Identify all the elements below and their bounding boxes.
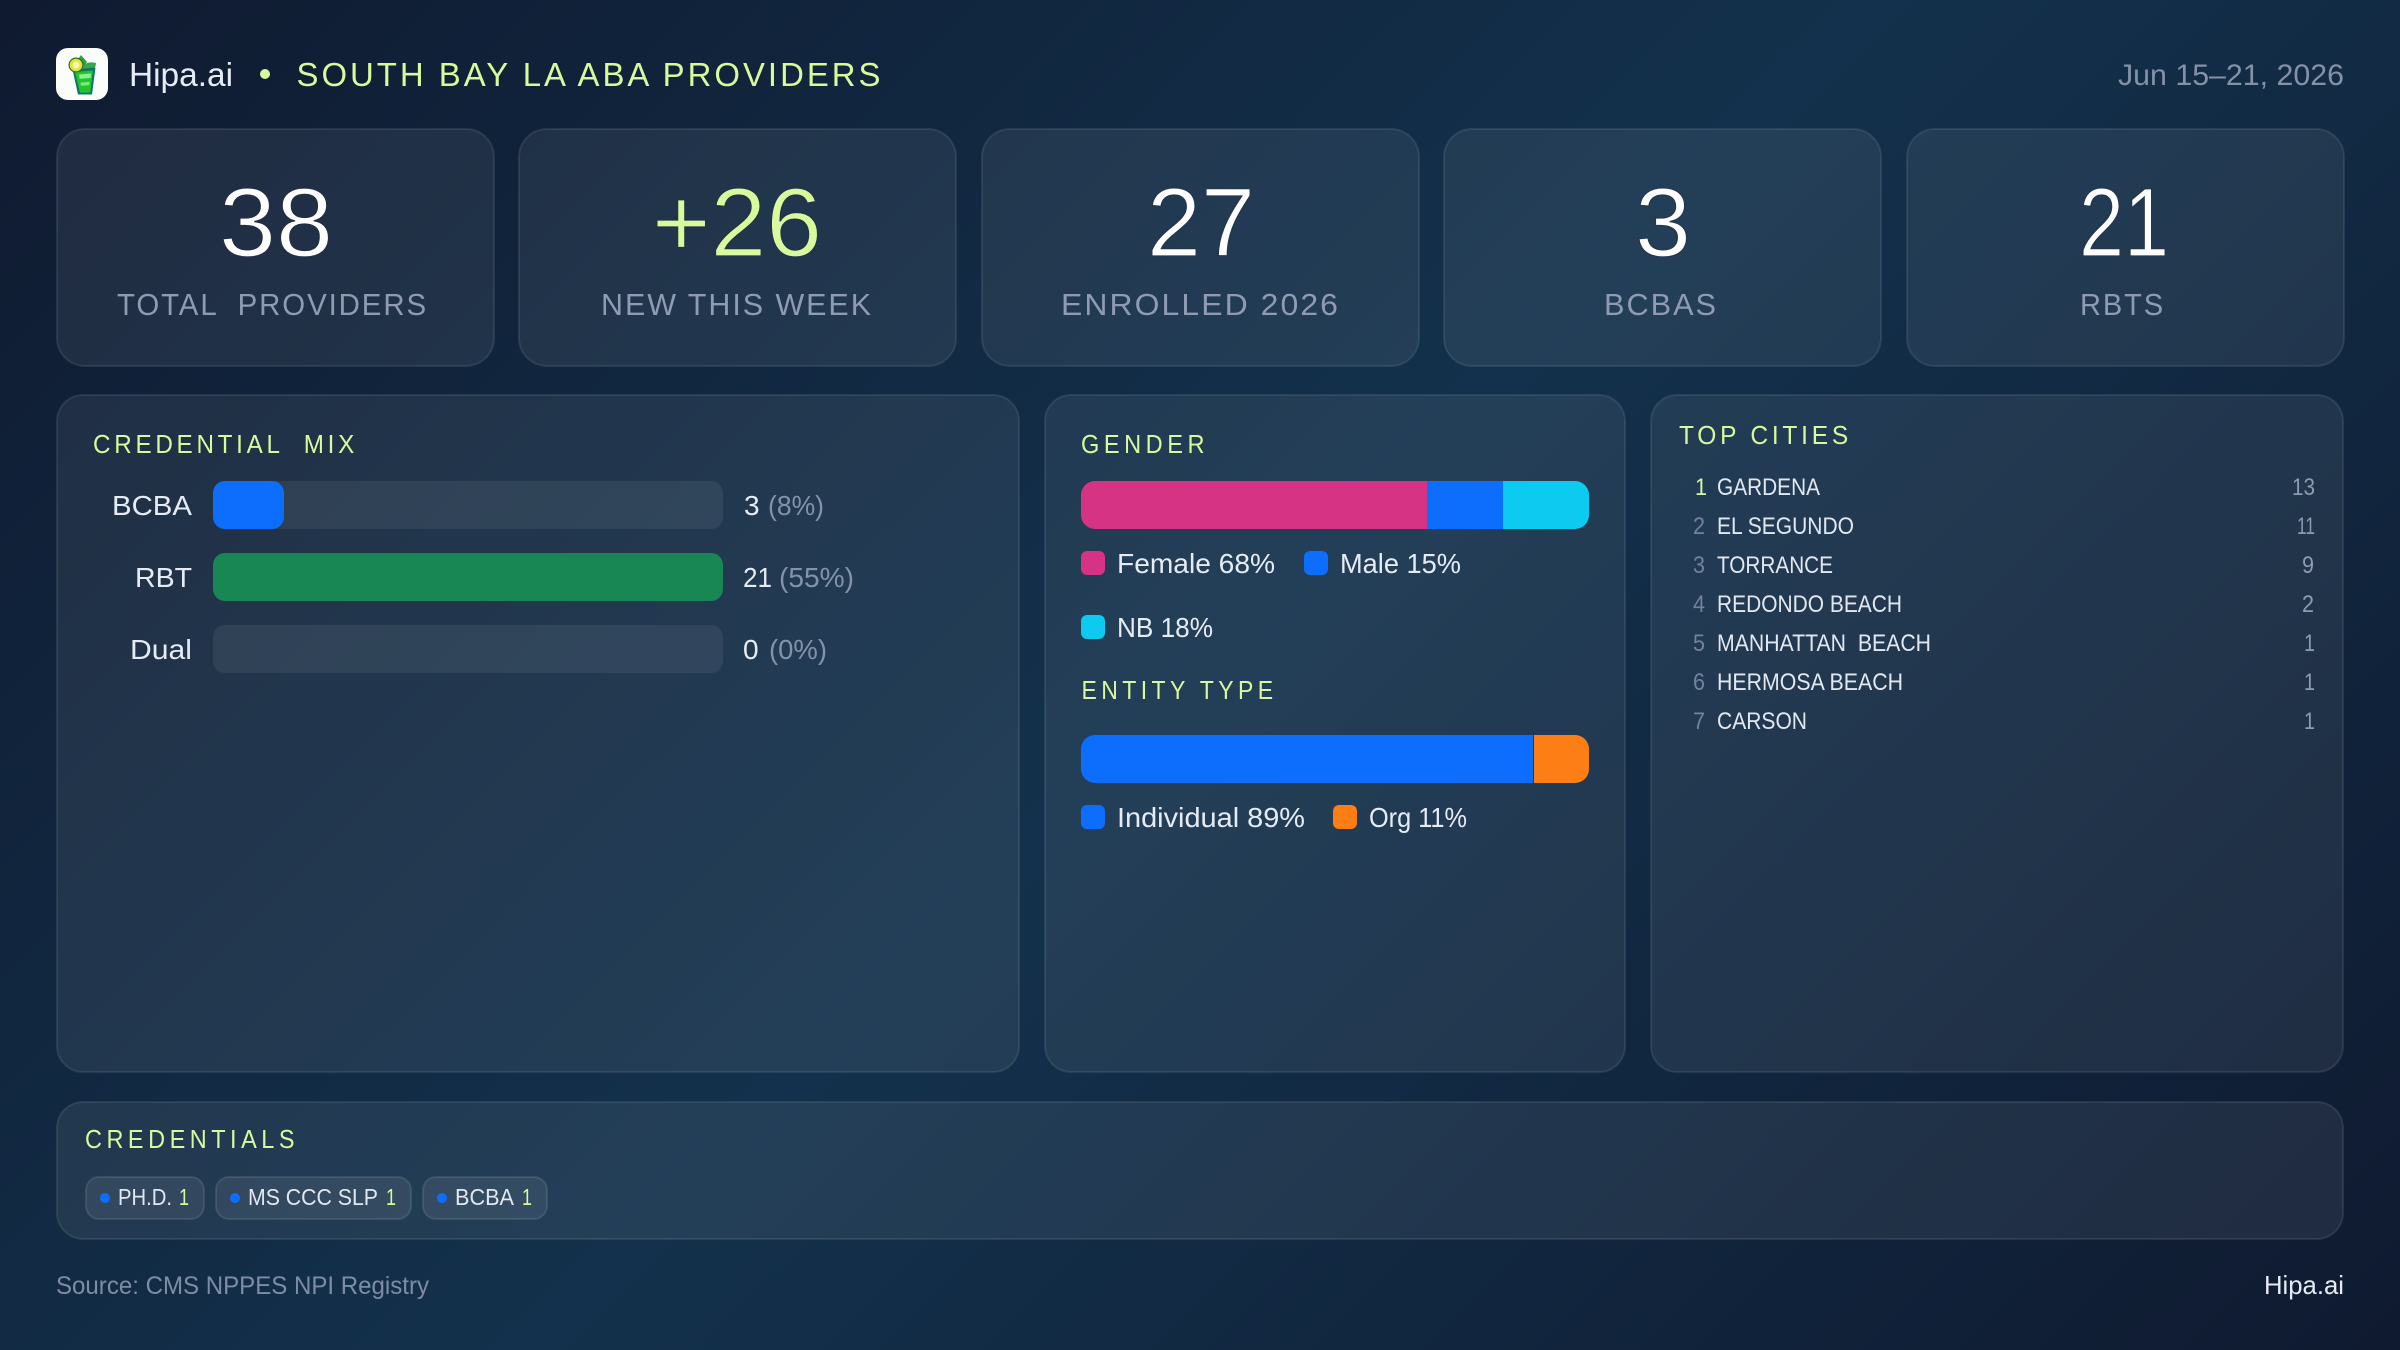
header <box>56 48 2344 100</box>
label: BCBAS <box>1604 287 1718 322</box>
city row 1: 13 <box>2292 474 2315 501</box>
kpi card: rbts <box>1907 129 2344 366</box>
kpi card: bcbas <box>1444 129 1881 366</box>
city row 5: MANHATTAN BEACH <box>1717 630 1931 657</box>
bar row: dual: (0%) <box>769 634 827 665</box>
legend: entity type: Individual 89% <box>1117 802 1305 833</box>
chip: ms ccc slp: MS CCC SLP <box>248 1184 378 1210</box>
legend: gender: Female 68% <box>1117 548 1275 579</box>
city row 4: 4 <box>1693 591 1705 618</box>
city row 4 <box>1693 591 2314 618</box>
city row 2 <box>1693 513 2315 540</box>
panel: top cities <box>1651 395 2343 1072</box>
city row 5: 5 <box>1693 630 1705 657</box>
source note: Source: CMS NPPES NPI Registry <box>56 1272 429 1300</box>
legend: entity type <box>1081 802 1467 833</box>
legend: gender: NB 18% <box>1117 612 1213 643</box>
city row 2: 11 <box>2297 513 2315 540</box>
panel: credential mix <box>57 395 1019 1072</box>
city row 6: 6 <box>1693 669 1705 696</box>
footer brand: Hipa.ai <box>2264 1270 2344 1300</box>
label: NEW THIS WEEK <box>601 287 873 322</box>
chip: ph.d.: PH.D. <box>118 1184 172 1210</box>
heading: gender: GENDER <box>1081 429 1209 459</box>
bar row: bcba: BCBA <box>112 490 192 521</box>
heading: entity type: ENTITY TYPE <box>1082 675 1278 705</box>
bar row: rbt: RBT <box>135 562 192 593</box>
value: 38 <box>219 168 333 277</box>
chip: ms ccc slp <box>216 1177 411 1219</box>
city row 5: 1 <box>2304 630 2315 657</box>
city row 6: 1 <box>2304 669 2315 696</box>
bar row: rbt: (55%) <box>779 562 854 593</box>
chip: bcba: 1 <box>522 1184 532 1210</box>
bar row: dual: 0 <box>743 634 759 665</box>
label: RBTS <box>2080 287 2165 322</box>
kpi card: new this week <box>519 129 956 366</box>
heading: CREDENTIALS <box>85 1124 299 1154</box>
bar row: bcba <box>112 481 824 529</box>
bar row: bcba: (8%) <box>768 490 824 521</box>
legend: entity type: Org 11% <box>1369 802 1467 833</box>
city row 6 <box>1693 669 2315 696</box>
city row 4: 2 <box>2302 591 2314 618</box>
chip: ph.d. <box>86 1177 204 1219</box>
value: 3 <box>1635 168 1691 277</box>
city row 7: CARSON <box>1717 708 1807 735</box>
heading: CREDENTIAL MIX <box>93 429 358 459</box>
city row 1: 1 <box>1695 474 1707 501</box>
value: 27 <box>1147 168 1255 277</box>
legend: gender: Male 15% <box>1340 548 1461 579</box>
chip: ms ccc slp: 1 <box>386 1184 396 1210</box>
city row 3: 3 <box>1693 552 1705 579</box>
bar row: rbt: 21 <box>743 562 772 593</box>
bar row: dual <box>130 625 827 673</box>
label: ENROLLED 2026 <box>1061 287 1340 322</box>
panel: credentials <box>57 1102 2343 1239</box>
city row 7 <box>1693 708 2315 735</box>
city row 7: 1 <box>2304 708 2315 735</box>
bar row: bcba: 3 <box>744 490 760 521</box>
panel: gender and entity type <box>1045 395 1625 1072</box>
kpi card: total providers <box>57 129 494 366</box>
date range: Jun 15–21, 2026 <box>2118 59 2344 92</box>
bar row: rbt <box>135 553 854 601</box>
city row 1: GARDENA <box>1717 474 1820 501</box>
city row 2: EL SEGUNDO <box>1717 513 1854 540</box>
icon: mojito glass logo <box>56 48 108 100</box>
city row 1 <box>1695 474 2315 501</box>
heading: TOP CITIES <box>1679 420 1852 450</box>
footer <box>56 1270 2344 1300</box>
bullet <box>260 69 270 79</box>
city row 3: TORRANCE <box>1717 552 1833 579</box>
bar row: dual: Dual <box>130 634 192 665</box>
value: 21 <box>2079 168 2169 277</box>
city row 6: HERMOSA BEACH <box>1717 669 1903 696</box>
chip: bcba <box>423 1177 547 1219</box>
label: TOTAL PROVIDERS <box>117 287 428 322</box>
stacked bar: entity type <box>1081 735 1589 783</box>
brand name: Hipa.ai <box>129 56 233 93</box>
stacked bar: gender <box>1081 481 1589 529</box>
chip: bcba: BCBA <box>455 1184 515 1210</box>
city row 5 <box>1693 630 2315 657</box>
city row 3: 9 <box>2302 552 2314 579</box>
city row 2: 2 <box>1693 513 1705 540</box>
city row 3 <box>1693 552 2314 579</box>
city row 7: 7 <box>1693 708 1705 735</box>
kpi card: enrolled 2026 <box>982 129 1419 366</box>
report title: SOUTH BAY LA ABA PROVIDERS <box>296 56 884 93</box>
legend: gender <box>1081 548 1461 643</box>
value: +26 <box>652 168 822 277</box>
city row 4: REDONDO BEACH <box>1717 591 1902 618</box>
chip: ph.d.: 1 <box>179 1184 189 1210</box>
